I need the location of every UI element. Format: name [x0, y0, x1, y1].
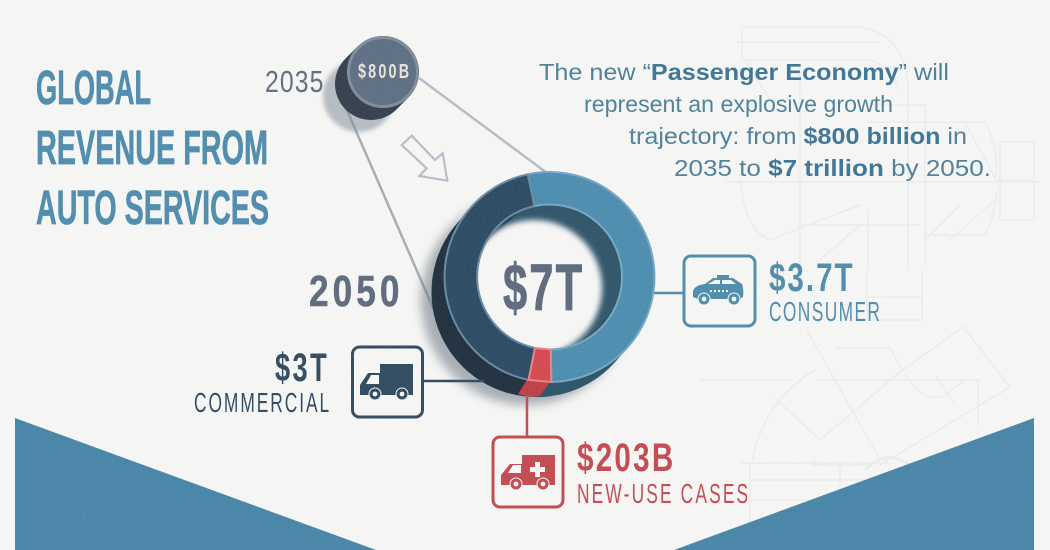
- donut hole with inner wall: [478, 206, 621, 348]
- blueprint drawing background: [700, 27, 1040, 535]
- paragraph: 2035 to $7 trillion by 2050.: [674, 155, 991, 181]
- donut extrusion: [536, 277, 550, 292]
- connector lines from small to large circle: [346, 78, 547, 310]
- segment: commercial: [445, 174, 535, 380]
- year label 2050: 2050: [309, 267, 399, 316]
- consumer label: CONSUMER: [769, 296, 880, 327]
- connector line commercial: [422, 380, 484, 382]
- callout: commercial: [194, 346, 484, 418]
- small circle shadow: [323, 60, 395, 132]
- donut drop shadow: [421, 195, 631, 405]
- small circle extrusion: [371, 72, 383, 84]
- new-use value: $203B: [577, 436, 673, 480]
- ambulance icon: [493, 437, 563, 507]
- paragraph: The new “ Passenger Economy ” will: [539, 59, 949, 85]
- callout: new-use cases: [493, 397, 748, 509]
- donut center value: $7T: [503, 250, 582, 324]
- title: GLOBAL: [36, 62, 151, 115]
- arrow down-right: [402, 136, 447, 181]
- connector line new-use: [526, 397, 528, 438]
- segment: new-use cases: [529, 348, 551, 382]
- truck icon: [352, 347, 422, 417]
- extrusion lower right section: [534, 300, 629, 397]
- title: REVENUE FROM: [36, 122, 268, 175]
- paragraph: trajectory: from $800 billion in: [629, 123, 967, 149]
- small circle value: $800B: [358, 60, 409, 83]
- donut chart: [421, 172, 654, 405]
- small circle face: [348, 38, 418, 106]
- callout: consumer: [684, 256, 880, 327]
- extrusion red section: [518, 378, 552, 397]
- new-use label: NEW-USE CASES: [577, 478, 748, 509]
- title: [36, 62, 269, 235]
- year label 2035: 2035: [265, 64, 323, 99]
- commercial value: $3T: [275, 346, 327, 390]
- taxi icon: [684, 256, 755, 326]
- paragraph: [539, 59, 991, 181]
- left blue triangle: [15, 418, 376, 550]
- commercial label: COMMERCIAL: [194, 387, 329, 418]
- paragraph: represent an explosive growth: [584, 91, 893, 117]
- small circle 2035 $800B: [323, 38, 418, 132]
- connector line consumer: [652, 292, 684, 294]
- right blue triangle: [674, 418, 1034, 550]
- segment: consumer: [528, 172, 654, 382]
- title: AUTO SERVICES: [36, 182, 269, 235]
- consumer value: $3.7T: [769, 256, 853, 300]
